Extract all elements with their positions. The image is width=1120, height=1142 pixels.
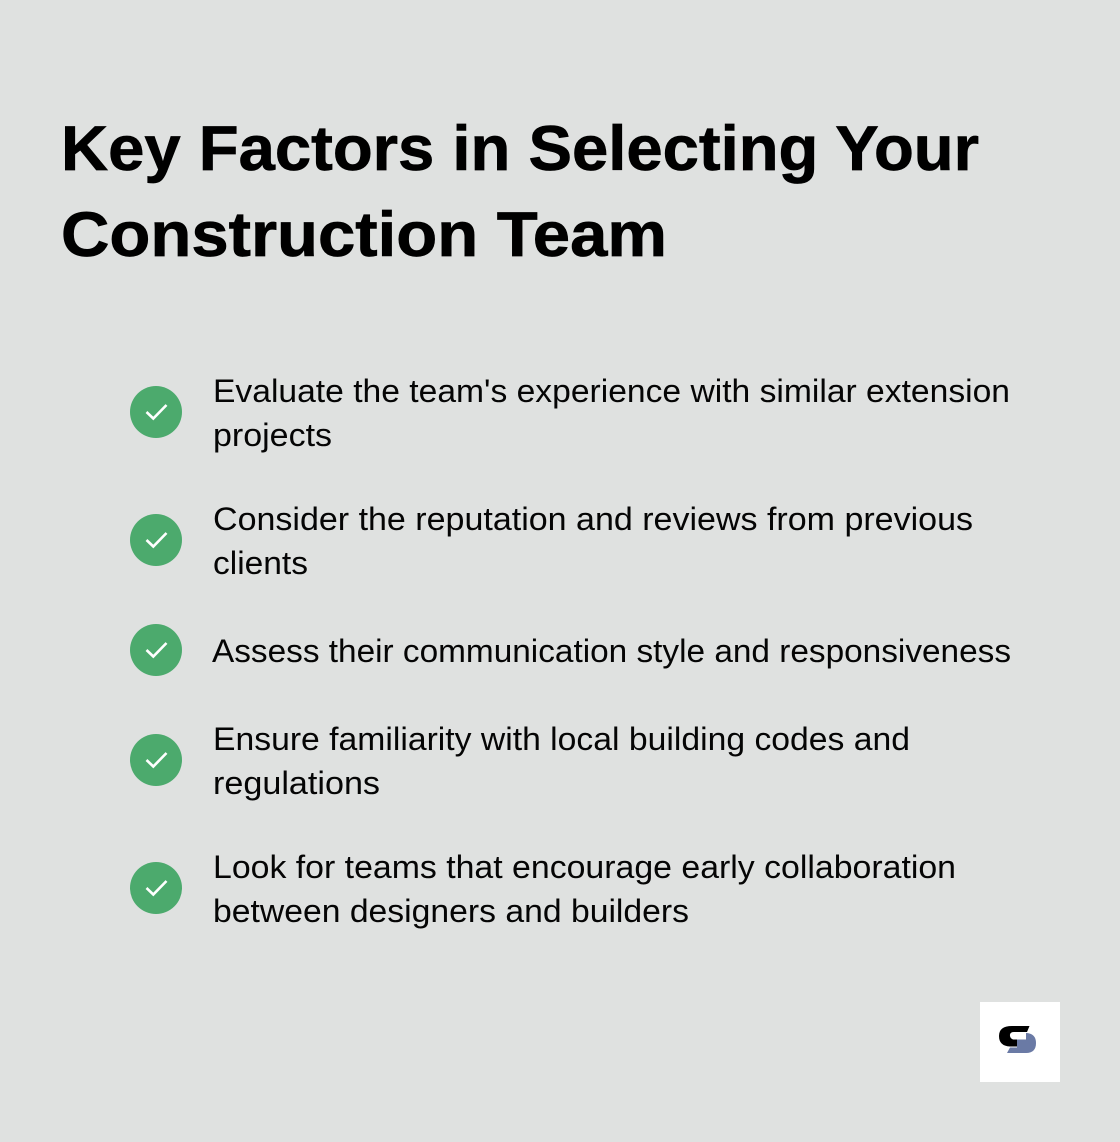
logo [980,1002,1060,1082]
icon: check circle 3 [130,624,182,676]
item 4: local codes [130,721,910,801]
text: item 1: projects [213,417,332,453]
text: item 4 [213,721,910,801]
icon: check circle 2 [130,514,182,566]
title [61,114,979,270]
text: item 1: Evaluate the team's experience with similar extension [213,373,1010,409]
text: item 5: between designers and builders [213,893,689,929]
item 5: collaboration [130,849,956,929]
text: item 2: Consider the reputation and reviews from previous [213,501,973,537]
text: item 4: Ensure familiarity with local building codes and [213,721,910,757]
text: item 2: clients [213,545,308,581]
item 3: communication [130,624,1011,676]
text: item 4: regulations [213,765,380,801]
text: item 2 [213,501,973,581]
icon: check circle 5 [130,862,182,914]
icon: check circle 4 [130,734,182,786]
text: item 1 [213,373,1010,453]
text: item 5 [213,849,956,929]
checklist [130,373,1011,929]
item 1: experience [130,373,1010,453]
icon: check circle 1 [130,386,182,438]
item 2: reputation [130,501,973,581]
text: item 3: Assess their communication style and responsiveness [212,633,1011,669]
title: Key Factors in Selecting Your [61,114,979,184]
text: item 5: Look for teams that encourage early collaboration [213,849,956,885]
title: Construction Team [61,200,667,270]
